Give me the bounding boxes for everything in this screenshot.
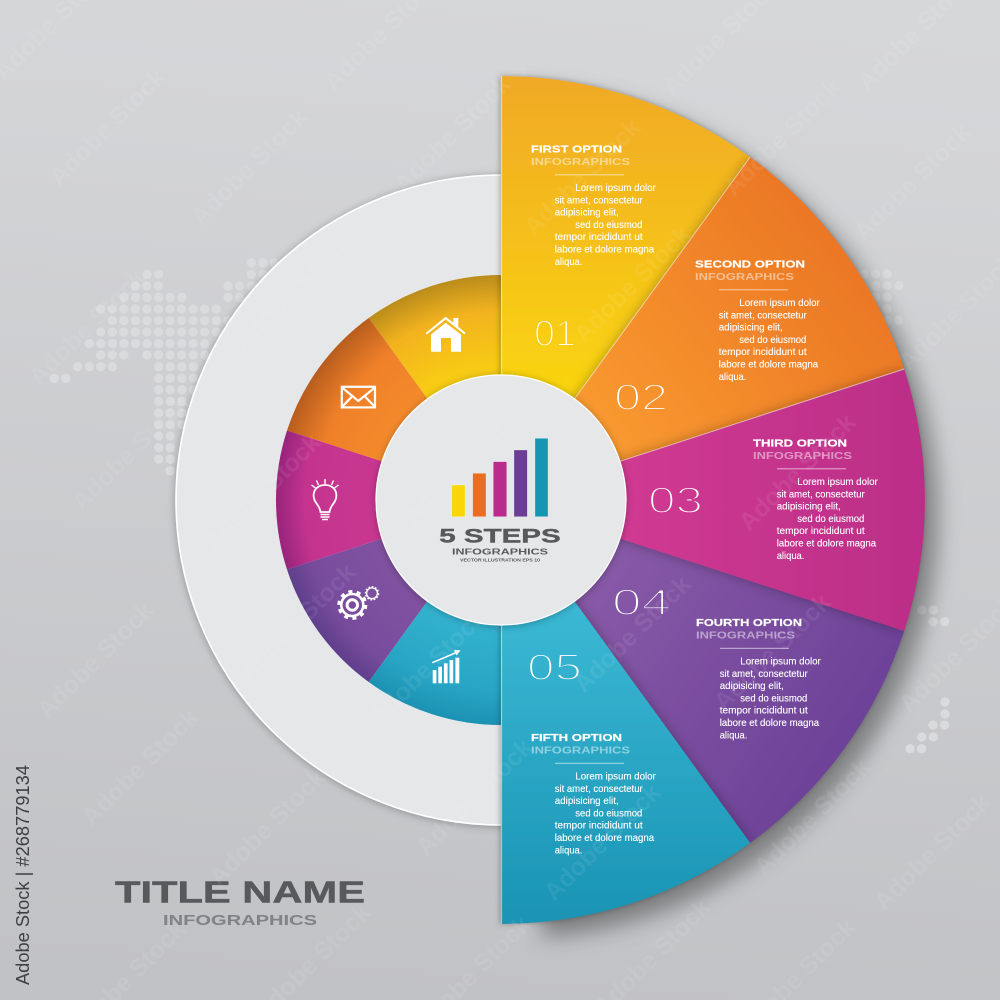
body text: Lorem ipsum dolor — [797, 477, 878, 488]
body text: aliqua. — [555, 257, 582, 268]
watermarks: Adobe Stock — [568, 220, 696, 348]
body text: labore et dolore magna — [555, 833, 654, 844]
watermarks: Adobe Stock — [23, 263, 151, 391]
watermarks: Adobe Stock — [363, 603, 491, 731]
body text: tempor incididunt ut — [555, 821, 643, 832]
watermarks: Adobe Stock — [748, 753, 876, 881]
ring segment: growth — [369, 500, 501, 725]
text block: first option — [531, 144, 656, 268]
body text — [555, 183, 656, 268]
body text: adipisicing elit, — [720, 681, 784, 692]
number 01: 01 — [534, 313, 576, 354]
watermarks: Adobe Stock — [733, 408, 861, 536]
body text — [555, 772, 656, 856]
stock id caption: Adobe Stock | #268779134 — [12, 765, 33, 985]
watermarks: Adobe Stock — [66, 388, 194, 516]
icon: growth chart — [432, 650, 460, 683]
watermarks: Adobe Stock — [198, 428, 326, 556]
heading: THIRD OPTION — [753, 438, 847, 450]
text block: third option — [753, 438, 878, 562]
ring segment: mail — [287, 318, 501, 500]
heading: FIFTH OPTION — [531, 733, 622, 744]
centre subheading: INFOGRAPHICS — [452, 546, 548, 556]
body text: aliqua. — [720, 730, 747, 741]
panel: right half-disc sectors — [501, 76, 925, 924]
watermarks: Adobe Stock — [185, 103, 313, 231]
body text: sit amet, consectetur — [555, 784, 643, 795]
body text: adipisicing elit, — [719, 323, 783, 334]
body text: aliqua. — [555, 845, 582, 856]
body text: aliqua. — [719, 372, 746, 383]
text block: second option — [695, 260, 820, 383]
centre caption: VECTOR ILLUSTRATION EPS 10 — [460, 558, 541, 562]
subheading: INFOGRAPHICS — [753, 451, 852, 462]
watermarks: Adobe Stock — [868, 788, 996, 916]
body text: tempor incididunt ut — [720, 706, 808, 717]
body text: sit amet, consectetur — [719, 310, 807, 321]
subheading: INFOGRAPHICS — [531, 746, 630, 756]
body text — [777, 477, 878, 562]
icon: gears — [339, 587, 379, 618]
sector 4 — [575, 539, 904, 843]
body text: Lorem ipsum dolor — [575, 772, 656, 782]
body text: sit amet, consectetur — [720, 669, 808, 680]
watermarks: Adobe Stock — [410, 733, 538, 861]
body text: labore et dolore magna — [777, 538, 876, 550]
number 04: 04 — [612, 582, 671, 623]
watermarks: Adobe Stock — [398, 403, 526, 531]
body text — [719, 298, 820, 383]
watermarks: Adobe Stock — [538, 778, 666, 906]
watermarks: Adobe Stock — [76, 703, 204, 831]
body text: sit amet, consectetur — [555, 195, 643, 206]
ring segment: home — [369, 275, 501, 500]
separator edge — [500, 76, 502, 924]
body text: tempor incididunt ut — [719, 347, 807, 358]
sector 5 — [496, 599, 752, 927]
watermarks: Adobe Stock — [31, 596, 159, 724]
subheading: INFOGRAPHICS — [531, 157, 630, 168]
text block: fifth option — [531, 733, 656, 856]
heading: SECOND OPTION — [695, 260, 805, 270]
watermarks: Adobe Stock — [228, 228, 356, 356]
subheading: INFOGRAPHICS — [696, 630, 795, 642]
panel: icon ring — [276, 275, 501, 725]
body text: sed do eiusmod — [739, 335, 807, 346]
body text: sed do eiusmod — [740, 693, 808, 704]
ring segment: settings — [287, 500, 501, 682]
watermarks: Adobe Stock — [568, 570, 696, 698]
title: TITLE NAME — [115, 876, 365, 910]
sector 3 — [618, 365, 926, 634]
watermarks: Adobe Stock — [43, 63, 171, 191]
heading: FOURTH OPTION — [696, 618, 802, 629]
sector 2 — [570, 154, 904, 461]
body text: labore et dolore magna — [555, 244, 654, 256]
body text: sit amet, consectetur — [777, 489, 865, 500]
sector 1 — [496, 73, 750, 398]
watermarks: Adobe Stock — [388, 70, 516, 198]
body text: labore et dolore magna — [719, 360, 818, 370]
subtitle: INFOGRAPHICS — [163, 912, 317, 929]
shadow of right half-disc — [514, 90, 938, 938]
watermarks: Adobe Stock — [708, 588, 836, 716]
body text: sed do eiusmod — [797, 514, 865, 525]
panel: outer light ring — [171, 172, 501, 830]
body text: adipisicing elit, — [555, 796, 619, 807]
number 03: 03 — [648, 480, 703, 521]
centre heading: 5 STEPS — [439, 526, 561, 547]
watermarks: Adobe Stock — [203, 763, 331, 891]
watermarks: Adobe Stock — [848, 118, 976, 246]
body text: adipisicing elit, — [777, 502, 841, 513]
body text: tempor incididunt ut — [777, 526, 865, 537]
body text: labore et dolore magna — [720, 718, 819, 729]
body text: Lorem ipsum dolor — [740, 656, 821, 668]
text block: fourth option — [696, 618, 821, 741]
watermarks: Adobe Stock — [718, 73, 846, 201]
number 02: 02 — [614, 377, 668, 418]
body text: adipisicing elit, — [555, 208, 619, 219]
body text: aliqua. — [777, 551, 804, 562]
body text: Lorem ipsum dolor — [739, 298, 820, 309]
heading: FIRST OPTION — [531, 144, 622, 156]
body text: Lorem ipsum dolor — [575, 183, 656, 194]
body text: sed do eiusmod — [575, 808, 643, 819]
icon: house — [426, 317, 466, 352]
body text: sed do eiusmod — [575, 220, 643, 231]
watermarks: Adobe Stock — [233, 558, 361, 686]
watermarks: Adobe Stock — [518, 113, 646, 241]
ring segment: idea — [276, 430, 501, 570]
body text: tempor incididunt ut — [555, 232, 643, 243]
panel: centre circle — [376, 375, 626, 625]
dotted world map — [54, 263, 946, 749]
bar chart — [452, 438, 548, 517]
icon: envelope — [342, 387, 375, 407]
number 05: 05 — [527, 647, 582, 688]
icon: light bulb — [312, 479, 338, 520]
subheading: INFOGRAPHICS — [695, 272, 794, 283]
body text — [720, 656, 821, 741]
